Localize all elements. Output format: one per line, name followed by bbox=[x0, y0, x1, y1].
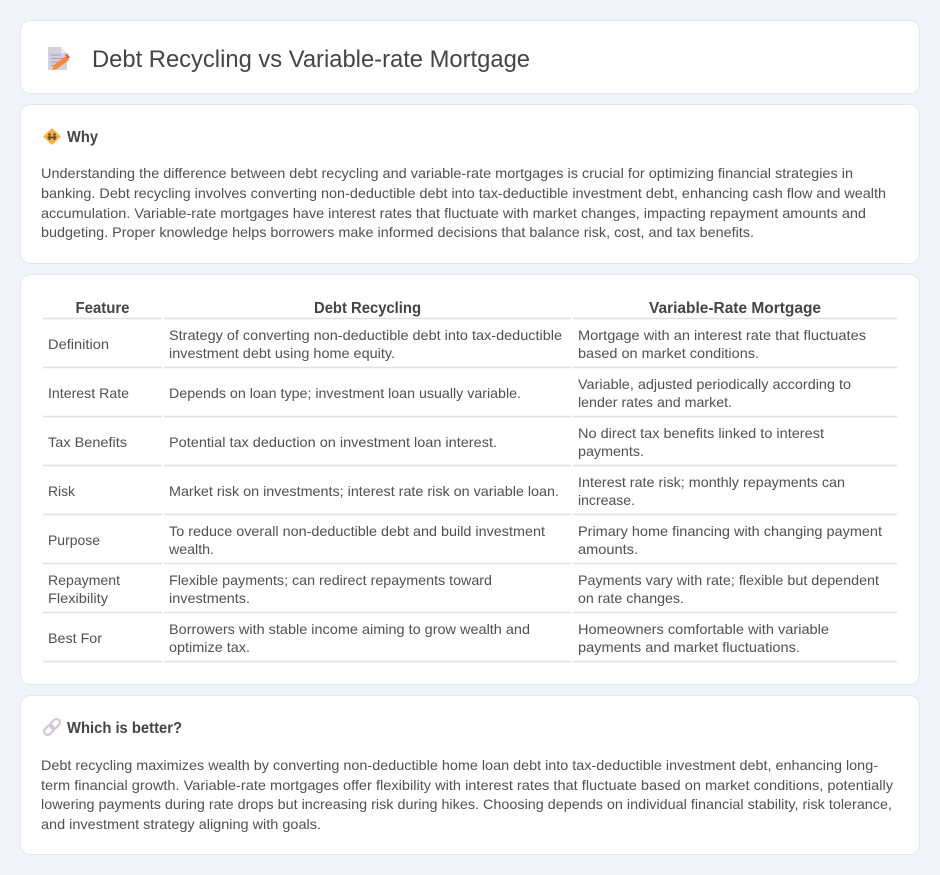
row: repayment flexibility: investments. bbox=[169, 590, 250, 606]
row: definition: investment debt using home equity. bbox=[169, 345, 395, 361]
table header bbox=[43, 300, 897, 318]
row: repayment flexibility: Flexibility bbox=[48, 590, 108, 606]
text block: why paragraph: accumulation. Variable-rate mortgages have interest rates that fluctuate with market changes, impacting repayment amounts and bbox=[41, 205, 866, 221]
row: best for: Borrowers with stable income aiming to grow wealth and bbox=[169, 621, 530, 637]
row: repayment flexibility: on rate changes. bbox=[578, 590, 684, 606]
row: definition bbox=[43, 327, 897, 368]
row: risk bbox=[43, 474, 897, 514]
row: repayment flexibility: Payments vary with rate; flexible but dependent bbox=[578, 572, 879, 588]
row: purpose: To reduce overall non-deductible debt and build investment bbox=[169, 523, 545, 539]
icon: document with pencil bbox=[48, 47, 70, 70]
row: repayment flexibility: Repayment bbox=[48, 572, 120, 588]
row: tax benefits: Tax Benefits bbox=[48, 434, 127, 450]
text block: which is better paragraph: and investment strategy aligning with goals. bbox=[41, 816, 321, 832]
heading: which is better: Which is better? bbox=[67, 720, 182, 737]
row: definition: Strategy of converting non-deductible debt into tax-deductible bbox=[169, 327, 562, 343]
panel: comparison table bbox=[20, 274, 920, 684]
row: repayment flexibility bbox=[43, 572, 897, 612]
row: risk: Interest rate risk; monthly repayments can bbox=[578, 474, 845, 490]
table header: Debt Recycling bbox=[314, 300, 421, 317]
text block: why paragraph bbox=[41, 165, 886, 240]
row: definition: Mortgage with an interest rate that fluctuates bbox=[578, 327, 866, 343]
text block: which is better paragraph: lowering payments during rate drops but increasing risk during hikes. Choosing depends on individual financial stability, risk tolerance, bbox=[41, 796, 892, 812]
row: best for: Best For bbox=[48, 630, 102, 646]
row: repayment flexibility: Flexible payments; can redirect repayments toward bbox=[169, 572, 492, 588]
row: definition: Definition bbox=[48, 336, 109, 352]
panel: why bbox=[20, 104, 920, 264]
row: definition: based on market conditions. bbox=[578, 345, 759, 361]
text block: why paragraph: Understanding the difference between debt recycling and variable-rate mortgages is crucial for optimizing financial strategies in bbox=[41, 165, 853, 181]
row: interest rate: lender rates and market. bbox=[578, 394, 732, 410]
row: best for: Homeowners comfortable with variable bbox=[578, 621, 829, 637]
row: interest rate: Variable, adjusted periodically according to bbox=[578, 376, 851, 392]
row: risk: Risk bbox=[48, 483, 76, 499]
table header: Feature bbox=[76, 300, 130, 317]
row: purpose: wealth. bbox=[168, 541, 214, 557]
text block: why paragraph: banking. Debt recycling involves converting non-deductible debt into tax-deductible investment debt, enhancing cash flow and wealth bbox=[41, 185, 886, 201]
title: Debt Recycling vs Variable-rate Mortgage bbox=[92, 46, 530, 73]
text block: why paragraph: budgeting. Proper knowledge helps borrowers make informed decisions that balance risk, cost, and tax benefits. bbox=[41, 224, 754, 240]
row: purpose bbox=[43, 523, 897, 564]
row: purpose: Primary home financing with changing payment bbox=[578, 523, 882, 539]
row: interest rate: Interest Rate bbox=[48, 385, 129, 401]
icon: chain link bbox=[43, 718, 61, 736]
row: risk: increase. bbox=[578, 492, 635, 508]
row: tax benefits: payments. bbox=[578, 443, 644, 459]
table header: Variable-Rate Mortgage bbox=[649, 300, 821, 317]
row: risk: Market risk on investments; interest rate risk on variable loan. bbox=[169, 483, 559, 499]
panel: which is better bbox=[20, 696, 920, 854]
text block: which is better paragraph: term financial growth. Variable-rate mortgages offer flexibility with interest rates that fluctuate based on market conditions, potentially bbox=[41, 777, 893, 793]
panel: title header bbox=[20, 20, 920, 94]
text block: which is better paragraph bbox=[41, 757, 893, 832]
row: interest rate: Depends on loan type; investment loan usually variable. bbox=[169, 385, 521, 401]
row: tax benefits: Potential tax deduction on investment loan interest. bbox=[169, 434, 497, 450]
row: tax benefits bbox=[43, 425, 897, 466]
row: tax benefits: No direct tax benefits linked to interest bbox=[578, 425, 824, 441]
row: purpose: amounts. bbox=[578, 541, 638, 557]
row: best for bbox=[43, 621, 897, 662]
row: best for: payments and market fluctuations. bbox=[578, 639, 800, 655]
row: interest rate bbox=[43, 376, 897, 416]
row: best for: optimize tax. bbox=[169, 639, 250, 655]
heading: why: Why bbox=[67, 129, 98, 146]
text block: which is better paragraph: Debt recycling maximizes wealth by converting non-deductible home loan debt into tax-deductible investment debt, enhancing long- bbox=[41, 757, 878, 773]
icon: warning diamond bbox=[44, 129, 60, 144]
row: purpose: Purpose bbox=[48, 532, 100, 548]
